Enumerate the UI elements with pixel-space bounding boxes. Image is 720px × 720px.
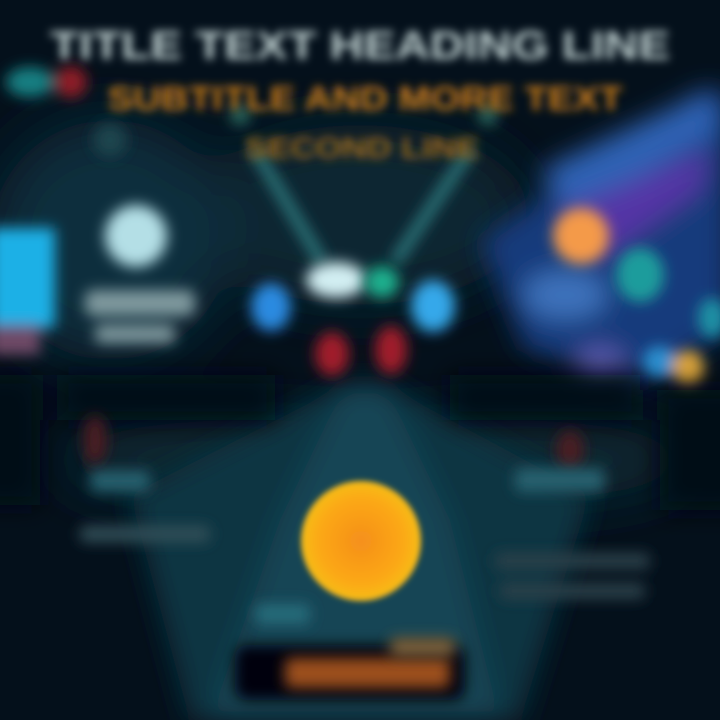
- icon: red left: [315, 332, 349, 376]
- icon: teal shape: [616, 248, 664, 302]
- caption: right: [495, 468, 650, 599]
- caption: left: [80, 470, 210, 542]
- icon: white circle: [105, 205, 167, 267]
- arrows: V lines: [255, 150, 470, 262]
- icon: center green: [365, 266, 399, 298]
- icon: small circle: [93, 123, 127, 157]
- panel: right nebula: [480, 90, 720, 385]
- icon: top-left badge: [6, 66, 87, 98]
- icon: center white: [306, 262, 366, 298]
- label under coin: [255, 604, 310, 624]
- subtitle line two: SECOND LINE: [244, 132, 480, 165]
- panel: left blue: [0, 228, 55, 355]
- arrow tips: [230, 105, 498, 125]
- icon: left blue: [251, 283, 291, 331]
- icon: blue and yellow cluster: [642, 346, 704, 386]
- icon: orange planet: [553, 208, 609, 264]
- icon: red right: [375, 326, 407, 374]
- road: [130, 385, 590, 720]
- title: TITLE TEXT HEADING LINE: [50, 24, 670, 68]
- icon: right blue: [411, 280, 455, 332]
- icon: orange coin: [301, 481, 421, 601]
- bottom banner: [235, 638, 465, 700]
- background glow: [0, 120, 690, 500]
- text block: left: [85, 290, 195, 343]
- subtitle line one: SUBTITLE AND MORE TEXT: [108, 80, 623, 118]
- shadow bars: [0, 375, 720, 510]
- red accents: [83, 415, 584, 470]
- icon: edge teal: [698, 298, 720, 338]
